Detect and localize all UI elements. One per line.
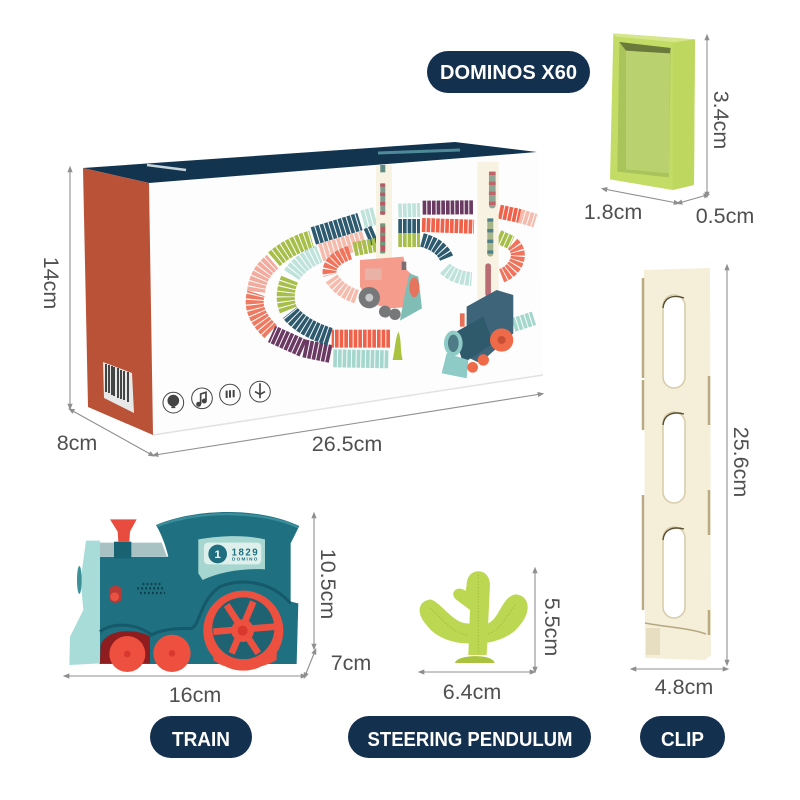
dimension 5.5cm: 5.5cm	[540, 598, 564, 656]
dimension 3.4cm: 3.4cm	[709, 91, 733, 149]
dimension 0.5cm	[679, 195, 754, 228]
train boiler top	[99, 543, 167, 556]
box bottom edge shadow	[153, 375, 543, 435]
train large wheel	[203, 591, 283, 671]
train undercarriage	[100, 631, 150, 663]
dimension 7cm: 7cm	[331, 651, 371, 675]
train chimney	[110, 519, 137, 558]
train front	[69, 541, 100, 665]
dimension 4.8cm: 4.8cm	[655, 675, 713, 699]
box feature icons	[163, 381, 270, 413]
label pill: train: TRAIN	[172, 729, 230, 751]
train headlamp	[77, 566, 82, 594]
clip slot shadows	[663, 296, 684, 540]
left tower on box	[376, 165, 392, 260]
dimension 10.5cm: 10.5cm	[316, 549, 340, 619]
label pill: train	[150, 716, 252, 758]
dimension 6.4cm: 6.4cm	[443, 680, 501, 704]
dimension 1.8cm	[584, 189, 677, 224]
dimension 8cm: 8cm	[57, 431, 97, 455]
train number plate: DOMINO	[232, 556, 258, 561]
label pill: clip: CLIP	[661, 729, 704, 751]
dimension 16cm: 16cm	[169, 683, 221, 707]
dimension 4.8cm	[633, 669, 726, 699]
dimension 26.5cm	[155, 394, 541, 456]
dimension 26.5cm: 26.5cm	[312, 432, 382, 456]
train red button	[109, 586, 122, 603]
clip slots	[663, 295, 685, 618]
blue train on box	[442, 290, 513, 378]
dimension 5.5cm	[535, 570, 564, 670]
dimension 1.8cm: 1.8cm	[584, 200, 642, 224]
dimension 10.5cm	[314, 515, 340, 647]
right tower on box	[477, 162, 499, 305]
train number plate: 1829	[232, 547, 258, 558]
label pill: steering pendulum: STEERING PENDULUM	[368, 729, 572, 751]
dimension 14cm: 14cm	[39, 257, 63, 309]
box side face	[83, 168, 153, 435]
dimension 25.6cm: 25.6cm	[729, 427, 753, 497]
box top face	[83, 142, 537, 183]
cactus steering pendulum	[420, 571, 528, 663]
label pill: steering pendulum	[348, 716, 591, 758]
dimension 8cm	[57, 410, 152, 455]
small cactus on box	[393, 332, 403, 360]
dimension 7cm	[305, 651, 371, 676]
label pill: clip	[640, 716, 725, 758]
pink train on box	[359, 257, 422, 321]
train body	[99, 512, 299, 664]
train skirt line	[100, 582, 291, 635]
box top print marks	[147, 165, 186, 170]
domino piece	[610, 33, 695, 190]
label pill: dominos x60	[427, 51, 590, 93]
train roof highlight	[157, 514, 298, 527]
clip	[643, 268, 711, 660]
box top print title	[378, 150, 460, 153]
label pill: dominos x60: DOMINOS X60	[440, 62, 577, 84]
box front face	[149, 153, 543, 435]
train	[69, 512, 299, 672]
dimension 0.5cm: 0.5cm	[696, 204, 754, 228]
box artwork: domino track	[163, 162, 535, 413]
train number plate	[198, 536, 265, 580]
barcode	[103, 362, 134, 413]
train front wheels	[109, 635, 191, 672]
dimension 6.4cm	[421, 672, 533, 704]
product box	[83, 142, 543, 435]
train speaker	[137, 584, 165, 593]
train number plate: 1	[214, 549, 221, 561]
